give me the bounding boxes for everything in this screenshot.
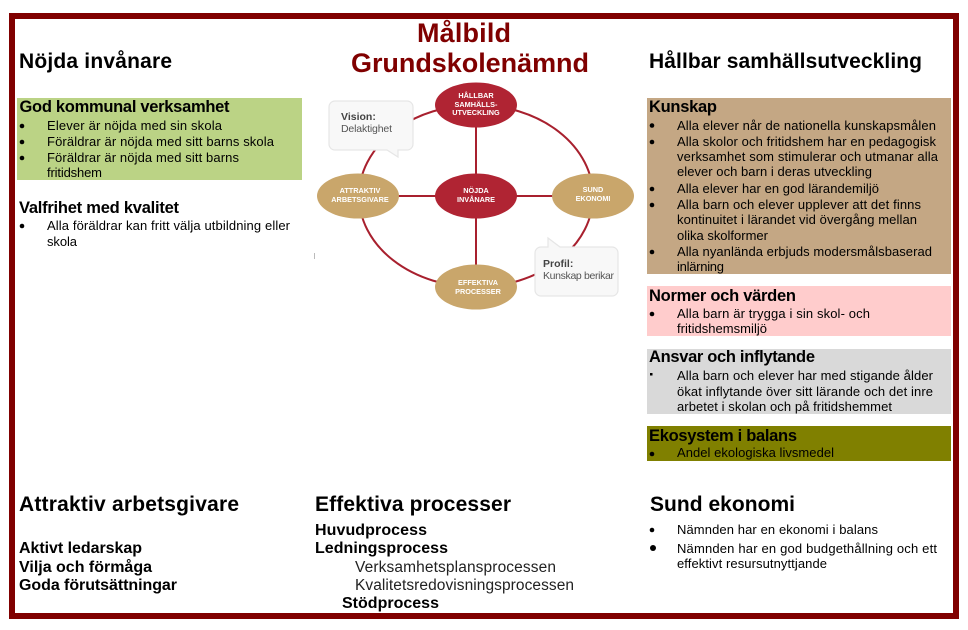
title: Målbild: [417, 18, 511, 48]
block: normer och värden: [647, 286, 951, 336]
callout: vision: Delaktighet: [341, 123, 392, 135]
block: kunskap: elever och barn i deras utveckling: [677, 164, 872, 179]
list: arbetsgivare items: Vilja och förmåga: [19, 558, 152, 576]
block: ansvar och inflytande: Ansvar och inflytande: [649, 348, 815, 366]
block: kunskap: verksamhet som stimulerar och utmanar alla: [677, 149, 939, 164]
callout: profil: [535, 238, 618, 296]
list: ekonomi items: Nämnden har en god budgethållning och ett: [677, 541, 937, 556]
heading: nöjda invånare: Nöjda invånare: [19, 50, 172, 73]
callout: vision: Vision:: [341, 111, 376, 123]
node: attraktiv arbetsgivare: ARBETSGIVARE: [331, 195, 389, 204]
panel: nöjda invånare: [17, 50, 302, 249]
list: arbetsgivare items: Goda förutsättningar: [19, 577, 177, 594]
panel: hållbar samhällsutveckling: [647, 50, 951, 461]
list: processes: Ledningsprocess: [315, 540, 448, 557]
block: valfrihet med kvalitet: Valfrihet med kvalitet: [19, 199, 180, 217]
panel: sund ekonomi: [650, 493, 937, 571]
heading: sund ekonomi: Sund ekonomi: [650, 493, 795, 516]
block: god kommunal verksamhet: [17, 98, 302, 180]
list: processes: Verksamhetsplansprocessen: [355, 559, 556, 576]
panel: effektiva processer: [315, 493, 574, 612]
callout: profil: Profil:: [543, 258, 573, 270]
panel: attraktiv arbetsgivare: [19, 493, 239, 594]
block: ekosystem i balans: Ekosystem i balans: [649, 427, 797, 445]
block: normer och värden: Alla barn är trygga i sin skol- och: [677, 306, 870, 321]
block: ekosystem i balans: Andel ekologiska livsmedel: [677, 445, 834, 460]
list: arbetsgivare items: Aktivt ledarskap: [19, 540, 142, 557]
list: processes: Huvudprocess: [315, 522, 427, 539]
block: kunskap: Alla elever når de nationella kunskapsmålen: [677, 118, 936, 133]
node: hållbar samhällsutveckling: UTVECKLING: [452, 108, 500, 117]
list: ekonomi items: effektivt resursutnyttjande: [677, 556, 827, 571]
node: hållbar samhällsutveckling: HÅLLBAR: [458, 91, 494, 100]
list: processes: [315, 522, 574, 612]
node: effektiva processer: PROCESSER: [455, 287, 502, 296]
node: effektiva processer: [435, 264, 517, 310]
node: nöjda invånare: [435, 174, 517, 218]
node: attraktiv arbetsgivare: [317, 174, 399, 218]
list: processes: Kvalitetsredovisningsprocessen: [355, 577, 574, 594]
block: god kommunal verksamhet: Föräldrar är nöjda med sitt barns skola: [47, 134, 275, 149]
block: kunskap: inlärning: [677, 259, 724, 274]
node: nöjda invånare: INVÅNARE: [457, 195, 495, 204]
node: nöjda invånare: NÖJDA: [463, 186, 489, 195]
block: valfrihet med kvalitet: Alla föräldrar kan fritt välja utbildning eller: [47, 218, 291, 233]
block: kunskap: kontinuitet i lärandet vid övergång mellan: [677, 212, 917, 227]
block: ekosystem i balans: [647, 426, 951, 461]
block: god kommunal verksamhet: God kommunal verksamhet: [20, 98, 230, 116]
block: kunskap: Alla skolor och fritidshem har en pedagogisk: [677, 134, 936, 149]
node: hållbar samhällsutveckling: [435, 82, 517, 128]
node: hållbar samhällsutveckling: SAMHÄLLS-: [455, 100, 498, 109]
block: valfrihet med kvalitet: [19, 199, 291, 249]
block: normer och värden: Normer och värden: [649, 287, 796, 305]
heading: attraktiv arbetsgivare: Attraktiv arbetsgivare: [19, 493, 239, 516]
block: kunskap: Kunskap: [649, 98, 717, 116]
chart: ring diagram: [314, 82, 634, 310]
node: sund ekonomi: EKONOMI: [576, 194, 610, 203]
block: kunskap: Alla barn och elever upplever att det finns: [677, 197, 922, 212]
block: kunskap: [647, 98, 951, 274]
block: valfrihet med kvalitet: skola: [47, 234, 78, 249]
block: kunskap: Alla nyanlända erbjuds modersmålsbaserad: [677, 244, 932, 259]
node: sund ekonomi: SUND: [583, 185, 603, 194]
node: sund ekonomi: [552, 174, 634, 218]
list: ekonomi items: Nämnden har en ekonomi i balans: [677, 522, 878, 537]
list: arbetsgivare items: [19, 540, 177, 594]
block: ansvar och inflytande: Alla barn och elever har med stigande ålder: [677, 368, 934, 383]
block: ansvar och inflytande: [647, 348, 951, 414]
callout: vision: [329, 101, 413, 157]
block: normer och värden: fritidshemsmiljö: [677, 321, 767, 336]
block: ansvar och inflytande: arbetet i skolan och på fritidshemmet: [677, 399, 892, 414]
node: effektiva processer: EFFEKTIVA: [458, 278, 499, 287]
block: ansvar och inflytande: ökat inflytande över sitt lärande och det inre: [677, 384, 933, 399]
block: kunskap: Alla elever har en god lärandemiljö: [677, 181, 879, 196]
node: attraktiv arbetsgivare: ATTRAKTIV: [340, 186, 381, 195]
list: processes: Stödprocess: [342, 595, 439, 612]
title: Grundskolenämnd: [351, 48, 589, 78]
title: [351, 18, 589, 78]
heading: hållbar samhällsutveckling: Hållbar samhällsutveckling: [649, 50, 922, 73]
block: kunskap: olika skolformer: [677, 228, 769, 243]
callout: profil: Kunskap berikar: [543, 270, 614, 282]
block: god kommunal verksamhet: fritidshem: [47, 165, 102, 180]
block: god kommunal verksamhet: Elever är nöjda med sin skola: [47, 118, 223, 133]
list: ekonomi items: [650, 522, 937, 571]
block: god kommunal verksamhet: Föräldrar är nöjda med sitt barns: [47, 150, 240, 165]
heading: effektiva processer: Effektiva processer: [315, 493, 511, 516]
